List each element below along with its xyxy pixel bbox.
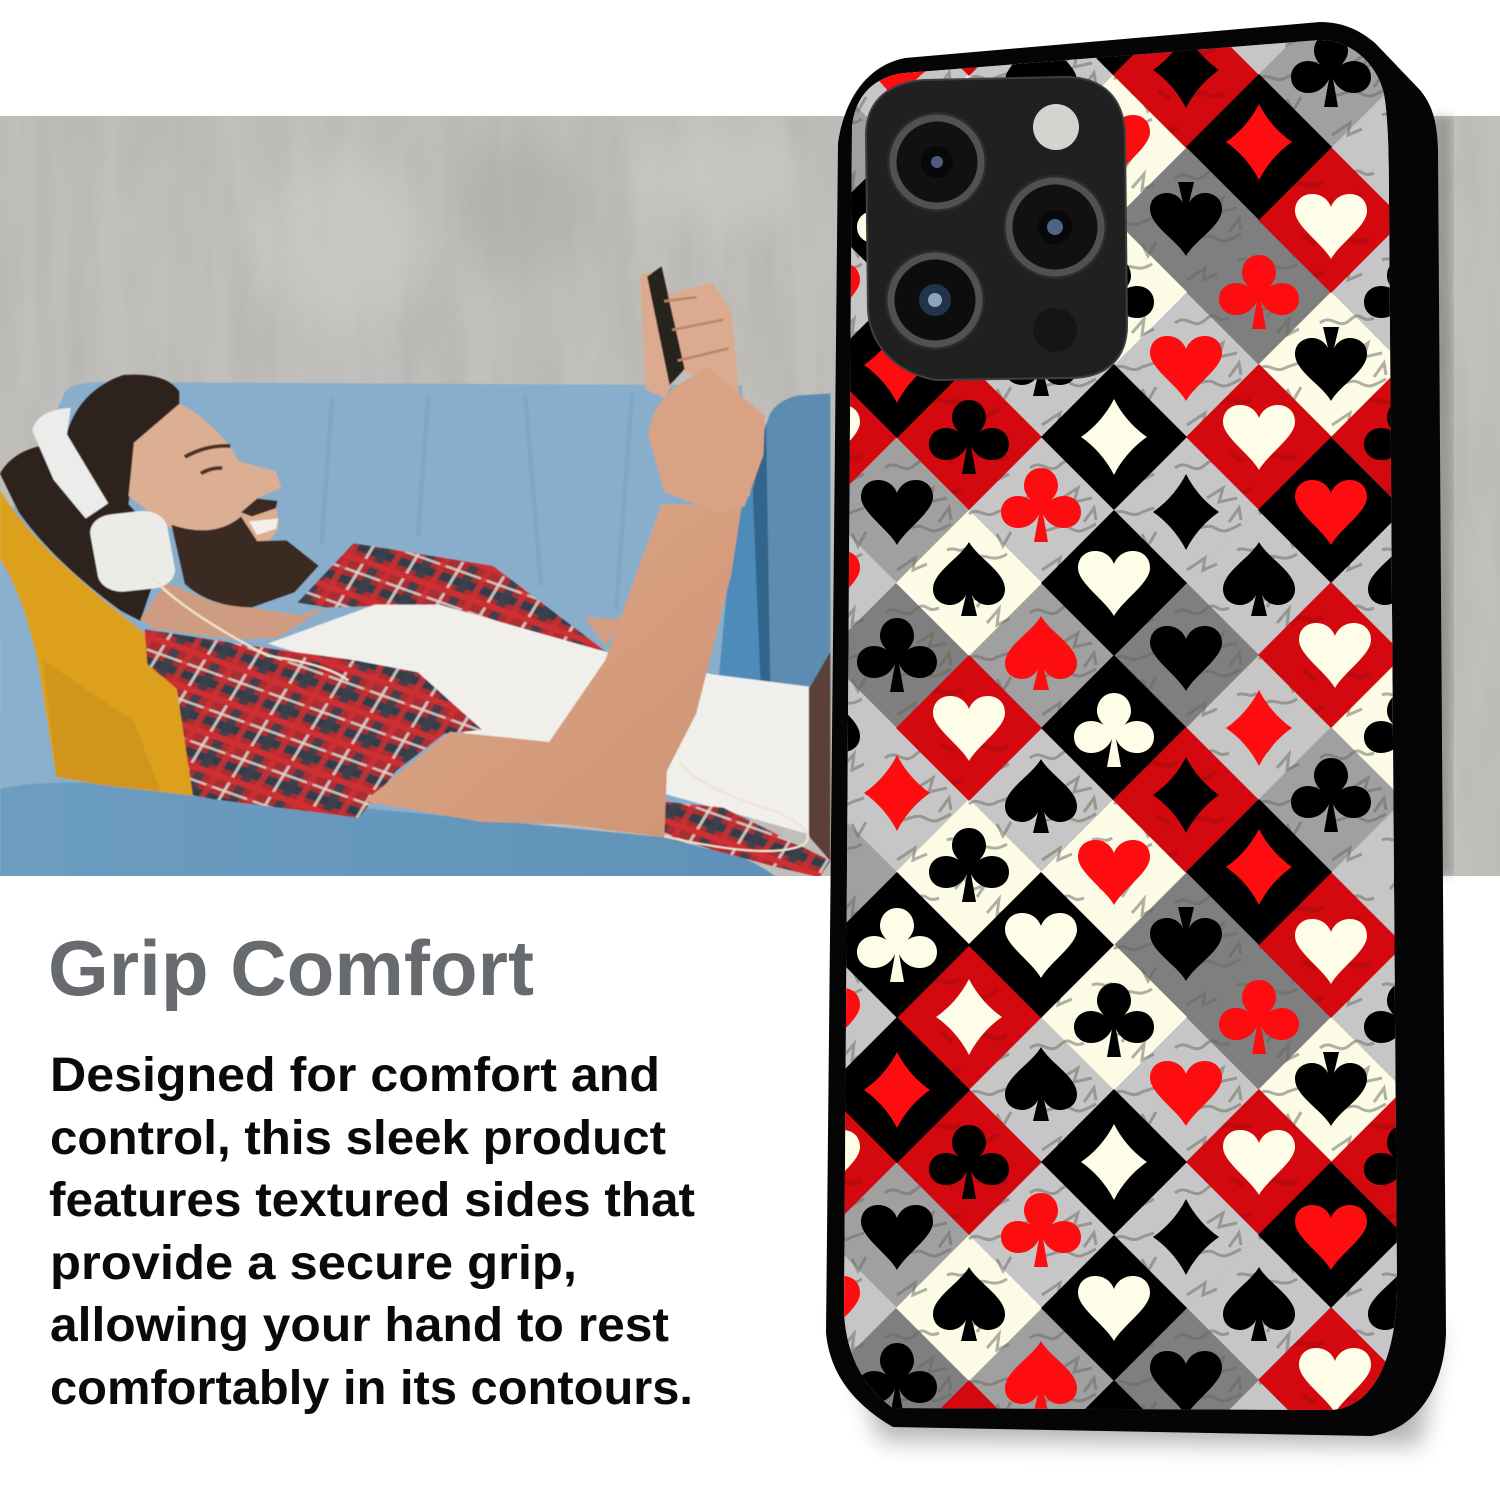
body text: features textured sides that — [49, 1174, 695, 1227]
far arm — [584, 616, 620, 646]
sofa back cushion — [0, 382, 750, 824]
case body — [826, 22, 1446, 1436]
plaid shirt hem — [664, 801, 830, 877]
camera module — [866, 77, 1127, 380]
headphone ear cup — [87, 509, 178, 594]
face — [128, 403, 306, 554]
body text: Designed for comfort and — [50, 1049, 660, 1102]
yellow pillow — [0, 490, 198, 796]
wall shadow beside case — [1432, 116, 1452, 876]
hair — [0, 375, 179, 621]
sofa and person — [0, 266, 830, 877]
neck — [140, 582, 327, 640]
sofa seat — [0, 783, 777, 877]
camera housing — [866, 77, 1127, 380]
phone case shadow — [840, 1310, 1440, 1445]
earphone cable — [153, 578, 808, 851]
sofa arm seam — [753, 422, 770, 689]
body text: control, this sleek product — [50, 1112, 666, 1165]
printed card suit pattern — [844, 40, 1397, 1410]
jeans — [809, 652, 830, 861]
upper plaid shirt — [297, 543, 605, 651]
left sofa cushion — [0, 562, 51, 791]
cushion right edge — [718, 492, 761, 689]
front hand — [648, 367, 765, 512]
finger creases — [664, 297, 729, 361]
concrete wall — [0, 116, 1500, 876]
eyebrow and eye — [185, 446, 230, 473]
moustache — [241, 498, 277, 516]
forearm and upper arm — [364, 504, 742, 837]
headphone band — [32, 408, 108, 519]
body text: provide a secure grip, — [50, 1237, 577, 1290]
lens top left — [887, 112, 987, 212]
phone case — [826, 22, 1446, 1436]
pillow shade — [43, 660, 161, 791]
white t-shirt — [268, 605, 809, 834]
heading: Grip Comfort — [48, 924, 534, 1012]
sofa arm — [750, 394, 830, 701]
body text — [49, 1049, 695, 1415]
teeth — [249, 519, 279, 535]
flash — [1033, 104, 1079, 150]
rear hand fingers — [640, 273, 739, 398]
lifestyle photo: man on sofa — [0, 116, 1500, 877]
beard — [171, 516, 319, 608]
lens bottom left — [885, 250, 985, 350]
lidar sensor — [1033, 308, 1077, 352]
lower plaid shirt — [145, 629, 482, 818]
cushion folds — [321, 394, 632, 611]
body text: allowing your hand to rest — [50, 1299, 669, 1352]
lens right — [1003, 175, 1107, 279]
body text: comfortably in its contours. — [50, 1362, 693, 1415]
held smartphone — [647, 266, 685, 385]
